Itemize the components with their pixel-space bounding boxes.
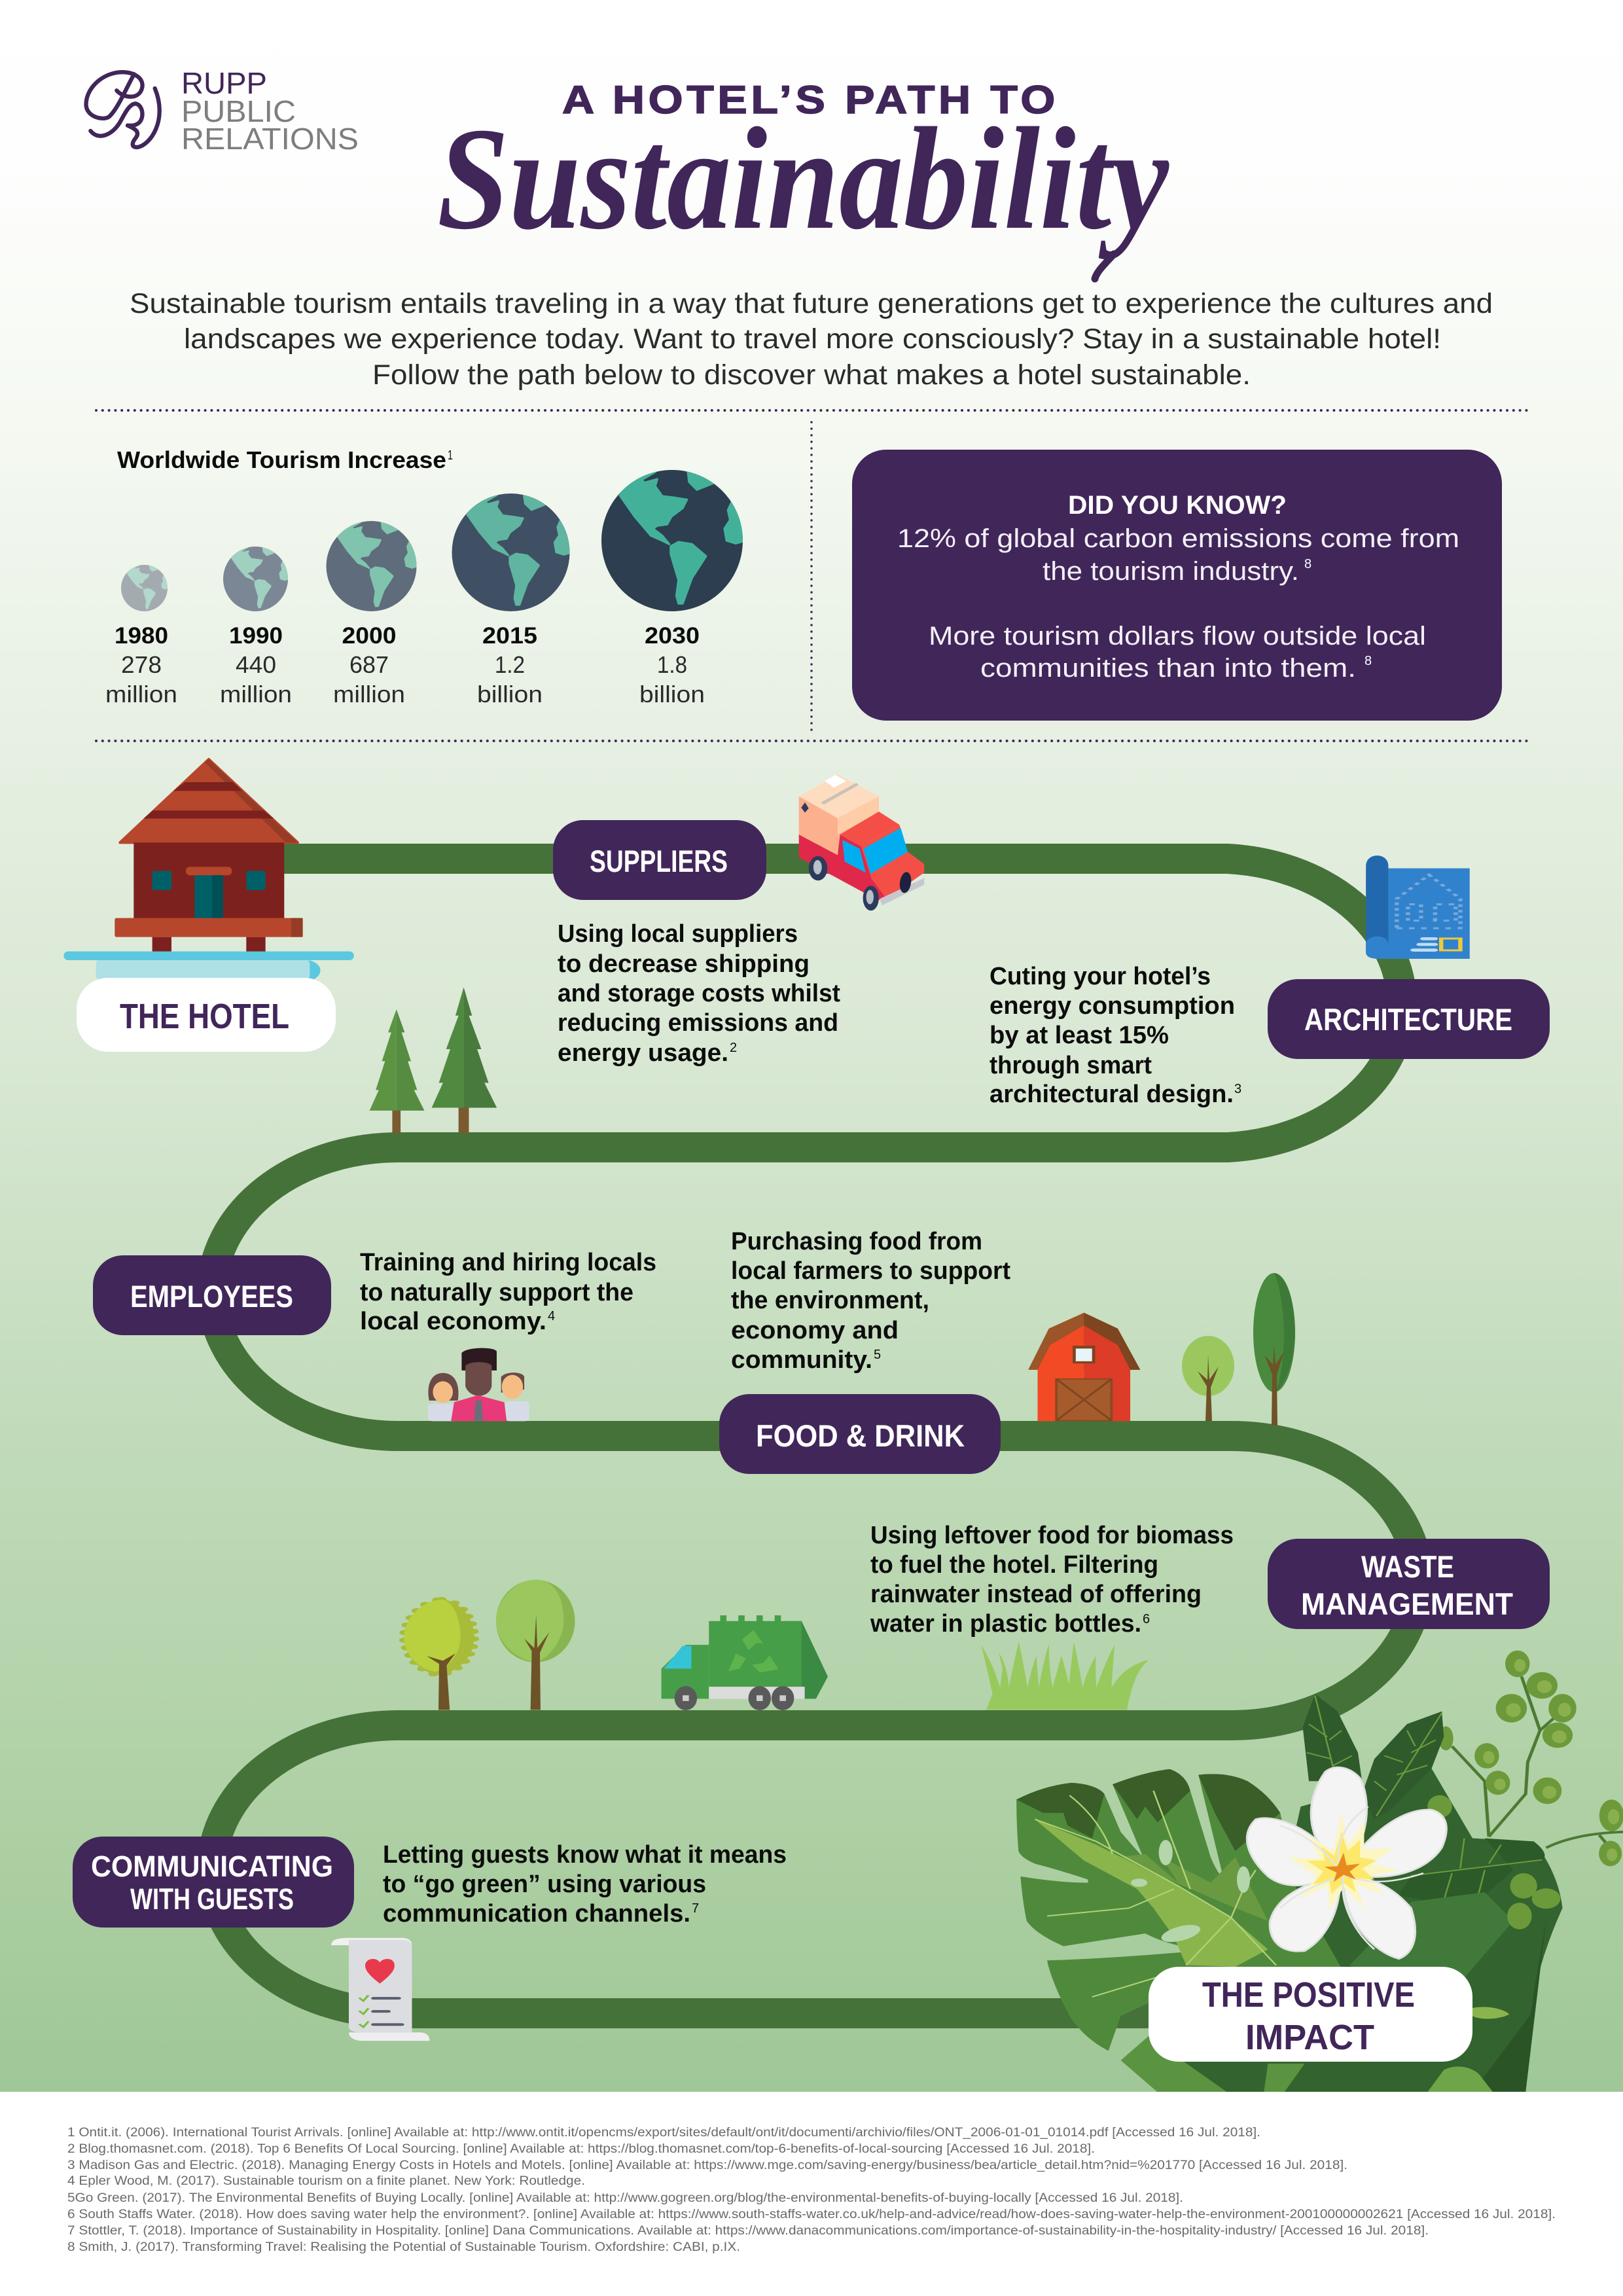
fact one: 12% of global carbon emissions come from	[897, 524, 1459, 553]
icon: garbage truck	[662, 1615, 828, 1710]
dark background foliage	[1178, 1768, 1563, 2092]
footnote references: 1 Ontit.it. (2006). International Tourist Arrivals. [online] Available at: http://www.ontit.it/opencms/export/sites/default/ont/it/documenti/archivio/files/ONT_2006-01-01_01014.pdf [Accessed 16 Jul. 2018].	[67, 2126, 1260, 2140]
tag: architecture	[1268, 979, 1550, 1059]
logo text: Rupp: RUPP	[181, 66, 267, 100]
globe 2030	[601, 470, 745, 611]
footnote references: 4 Epler Wood, M. (2017). Sustainable tourism on a finite planet. New York: Routledge.	[67, 2174, 585, 2188]
text: employees	[360, 1249, 656, 1335]
tag: suppliers: SUPPLIERS	[590, 844, 728, 878]
tag: employees	[93, 1255, 331, 1335]
text: employees: Training and hiring locals	[360, 1249, 656, 1276]
panel: worldwide tourism increase	[105, 446, 745, 708]
tag: employees: EMPLOYEES	[130, 1279, 293, 1314]
text: communicating with guests	[383, 1841, 787, 1928]
tag: the hotel	[77, 978, 336, 1052]
flower	[1247, 1767, 1446, 1959]
text: waste management: rainwater instead of offering	[870, 1581, 1202, 1608]
stat 2000: million	[333, 681, 405, 708]
title script: sustainability: Sustainability	[437, 98, 1169, 260]
globe 2015	[452, 493, 572, 611]
tag: waste management: WASTE	[1361, 1549, 1454, 1584]
icon: grass	[981, 1641, 1149, 1710]
intro text: Sustainable tourism entails traveling in a way that future generations get to experience the cultures and	[130, 288, 1493, 319]
text: food and drink: local farmers to support	[731, 1257, 1010, 1285]
stat 1980	[105, 623, 177, 708]
chart heading: 1	[448, 448, 453, 463]
text: food and drink	[731, 1228, 1010, 1374]
tag: communicating with guests	[73, 1837, 354, 1928]
text: communicating with guests: communication channels.	[383, 1900, 690, 1928]
intro text: landscapes we experience today. Want to travel more consciously? Stay in a sustainable hotel!	[184, 323, 1441, 355]
tag: architecture: ARCHITECTURE	[1304, 1002, 1512, 1037]
text: architecture: architectural design.	[990, 1081, 1234, 1108]
tag: communicating with guests: COMMUNICATING	[91, 1850, 333, 1883]
stat 2015: billion	[477, 681, 543, 708]
footnote references: 3 Madison Gas and Electric. (2018). Managing Energy Costs in Hotels and Motels. [online] Available at: https://www.mge.com/saving-energy/business/bea/article_detail.htm?nid=%201770 [Accessed 16 Jul. 2018].	[67, 2159, 1347, 2172]
stat 1980: million	[105, 681, 177, 708]
stat 1990	[220, 623, 292, 708]
globe 1990	[223, 547, 289, 611]
text: architecture: energy consumption	[990, 992, 1235, 1020]
footnote references: 2 Blog.thomasnet.com. (2018). Top 6 Benefits Of Local Sourcing. [online] Available at: https://blog.thomasnet.com/top-6-benefits-of-local-sourcing [Accessed 16 Jul. 2018].	[67, 2142, 1095, 2156]
icon: checklist document	[331, 1938, 429, 2041]
icon: farm trees	[1182, 1273, 1295, 1426]
tag: the hotel: THE HOTEL	[120, 997, 289, 1036]
title script: y tail flourish	[1095, 254, 1114, 279]
tag: communicating with guests: WITH GUESTS	[130, 1882, 294, 1916]
text: food and drink: economy and	[731, 1317, 899, 1344]
intro text	[130, 288, 1493, 391]
text: food and drink: community.	[731, 1346, 872, 1374]
footnote references	[67, 2126, 1556, 2254]
text: food and drink: Purchasing food from	[731, 1228, 982, 1255]
tag: the positive impact: IMPACT	[1245, 2018, 1374, 2057]
text: architecture: 3	[1234, 1082, 1241, 1096]
globe 1980	[121, 565, 168, 611]
stat 1990: 440	[236, 651, 276, 678]
icon: blueprint	[1366, 855, 1470, 959]
stat 2015: 1.2	[495, 651, 525, 678]
fact one	[897, 524, 1459, 586]
intro text: Follow the path below to discover what makes a hotel sustainable.	[372, 359, 1251, 391]
fact two: 8	[1364, 654, 1372, 668]
title line: a hotel's path to: A HOTEL’S PATH TO	[562, 78, 1059, 122]
text: food and drink: the environment,	[731, 1287, 929, 1314]
stat 2015: 2015	[482, 623, 537, 649]
icon: people	[428, 1348, 529, 1421]
fact one: 8	[1304, 557, 1311, 571]
fact two	[929, 622, 1426, 683]
mid leaves	[1120, 1839, 1546, 2092]
more berries	[1427, 1795, 1560, 1929]
icon: hotel	[63, 759, 354, 982]
title	[437, 78, 1169, 279]
footnote references: 8 Smith, J. (2017). Transforming Travel: Realising the Potential of Sustainable Tourism. Oxfordshire: CABI, p.IX.	[67, 2240, 740, 2254]
text: waste management: 6	[1143, 1612, 1150, 1626]
vine with berries	[1440, 1651, 1623, 1867]
tag: food and drink	[719, 1394, 1001, 1474]
logo text: Public: PUBLIC	[181, 94, 296, 128]
icon: delivery truck	[799, 774, 924, 910]
tag: the positive impact	[1149, 1967, 1472, 2062]
text: employees: 4	[548, 1309, 555, 1323]
text: employees: to naturally support the	[360, 1279, 633, 1306]
stat 2000: 687	[349, 651, 389, 678]
logo text: Relations: RELATIONS	[181, 122, 359, 156]
text: suppliers: energy usage.	[558, 1039, 728, 1067]
text: architecture: by at least 15%	[990, 1022, 1169, 1049]
logo	[86, 66, 359, 156]
monstera leaf	[1016, 1769, 1342, 2051]
winding path road	[212, 859, 1418, 2013]
fact one: the tourism industry.	[1043, 557, 1299, 586]
fact two: communities than into them.	[980, 654, 1356, 683]
text: architecture	[990, 963, 1241, 1108]
chart heading: Worldwide Tourism Increase	[117, 446, 446, 473]
stat 2030	[639, 623, 705, 708]
footnote references: 6 South Staffs Water. (2018). How does saving water help the environment?. [online] Available at: https://www.south-staffs-water.co.uk/help-and-advice/read/how-does-saving-water-help-the-environment-200100000002621 [Accessed 16 Jul. 2018].	[67, 2208, 1556, 2221]
text: communicating with guests: 7	[692, 1901, 699, 1916]
footnote references: 7 Stottler, T. (2018). Importance of Sustainability in Hospitality. [online] Dana Communications. Available at: https://www.danacommunications.com/importance-of-sustainability-in-the-hospitality-industry/ [Accessed 16 Jul. 2018].	[67, 2224, 1429, 2238]
tag: waste management	[1268, 1539, 1550, 1629]
stat 1990: 1990	[229, 623, 283, 649]
stat 1980: 1980	[115, 623, 168, 649]
stat 1990: million	[220, 681, 292, 708]
text: architecture: through smart	[990, 1052, 1152, 1079]
stat 1980: 278	[121, 651, 162, 678]
globe 2000	[326, 521, 418, 611]
text: communicating with guests: Letting guests know what it means	[383, 1841, 787, 1869]
text: suppliers: to decrease shipping	[558, 950, 810, 978]
footnote references: 5Go Green. (2017). The Environmental Benefits of Buying Locally. [online] Available at: http://www.gogreen.org/blog/the-environmental-benefits-of-buying-locally [Accessed 16 Jul. 2018].	[67, 2191, 1183, 2205]
stat 2030: 2030	[645, 623, 700, 649]
upper leaf two	[1362, 1712, 1444, 1820]
text: suppliers: Using local suppliers	[558, 920, 798, 948]
icon: logo monogram	[86, 72, 160, 147]
text: suppliers: and storage costs whilst	[558, 980, 840, 1007]
upper leaf one	[1303, 1694, 1362, 1781]
text: suppliers	[558, 920, 840, 1067]
text: waste management: Using leftover food for biomass	[870, 1522, 1234, 1549]
text: food and drink: 5	[874, 1348, 881, 1362]
icon: lower trees	[404, 1580, 575, 1710]
stat 2015	[477, 623, 543, 708]
heading: did you know: DID YOU KNOW?	[1068, 491, 1287, 520]
text: architecture: Cuting your hotel’s	[990, 963, 1211, 990]
illustration: tropical leaves and flower	[1016, 1651, 1623, 2092]
fact two: More tourism dollars flow outside local	[929, 622, 1426, 651]
panel: did you know	[852, 450, 1502, 721]
stat 2030: billion	[639, 681, 705, 708]
tag: food and drink: FOOD & DRINK	[756, 1418, 965, 1453]
stat 2030: 1.8	[657, 651, 687, 678]
tag: suppliers	[553, 820, 766, 900]
text: employees: local economy.	[360, 1308, 546, 1335]
icon: barn	[1028, 1313, 1140, 1421]
stat 2000	[333, 623, 405, 708]
tag: the positive impact: THE POSITIVE	[1202, 1975, 1415, 2015]
text: waste management	[870, 1522, 1234, 1638]
text: waste management: water in plastic bottles.	[870, 1610, 1141, 1638]
text: suppliers: 2	[730, 1041, 737, 1055]
text: waste management: to fuel the hotel. Filtering	[870, 1551, 1158, 1579]
text: communicating with guests: to “go green” using various	[383, 1871, 706, 1898]
text: suppliers: reducing emissions and	[558, 1009, 838, 1037]
stat 2000: 2000	[342, 623, 397, 649]
icon: pine trees	[370, 987, 497, 1133]
tag: waste management: MANAGEMENT	[1301, 1587, 1513, 1621]
